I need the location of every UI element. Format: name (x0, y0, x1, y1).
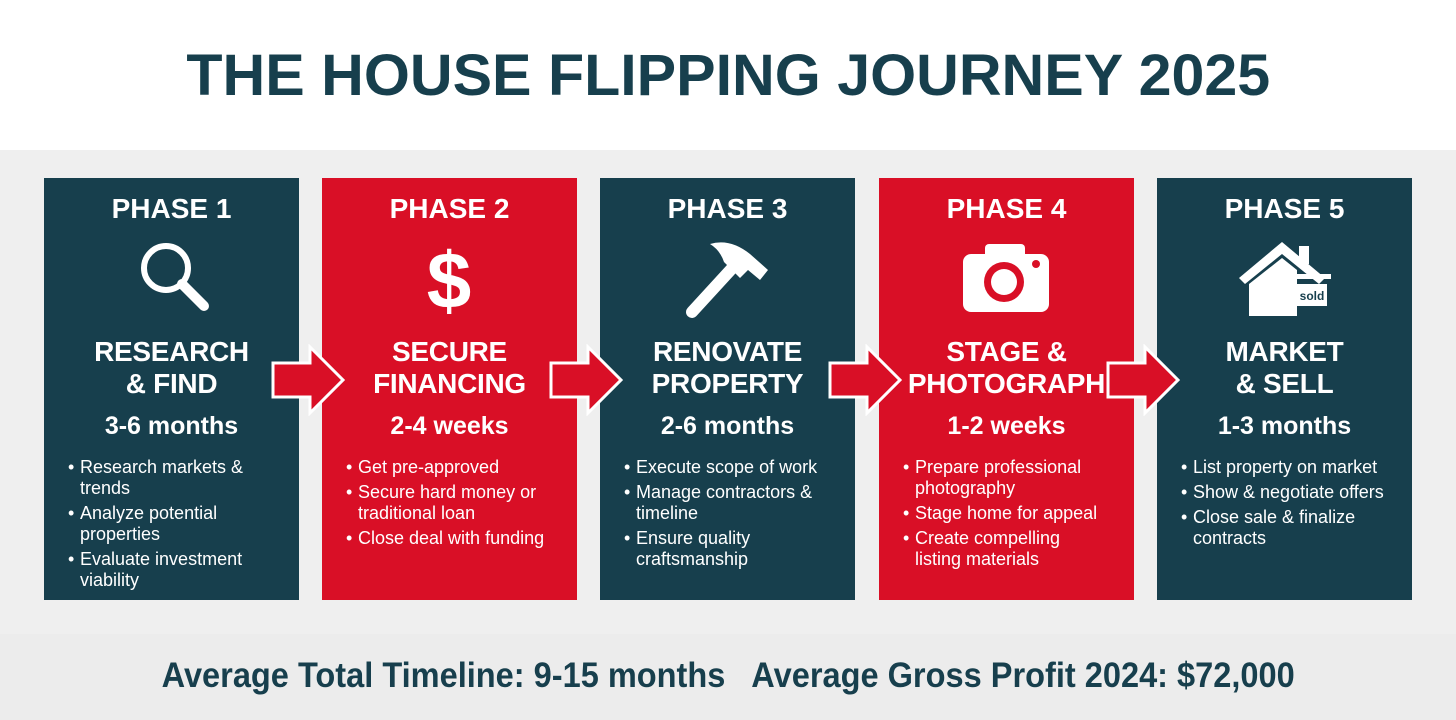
arrow 2 (550, 344, 623, 416)
bullets: List property on market (1193, 457, 1377, 477)
bullets (904, 457, 1097, 569)
footer stats: Average Total Timeline: 9-15 months Average Gross Profit 2024: $72,000 (161, 656, 1295, 695)
duration: 1-2 weeks (947, 412, 1066, 440)
icon: camera (963, 244, 1049, 312)
phase label: PHASE 2 (390, 193, 509, 224)
bullets: Analyze potential properties (80, 503, 217, 544)
bullets: Research markets & trends (80, 457, 243, 498)
bullets: Execute scope of work (636, 457, 817, 477)
panel: phase 5 (1157, 178, 1412, 600)
bullets: Show & negotiate offers (1193, 482, 1384, 502)
arrow 1 (272, 344, 345, 416)
heading (1226, 336, 1344, 399)
heading: FINANCING (373, 368, 526, 399)
phase label: PHASE 3 (668, 193, 787, 224)
duration: 3-6 months (105, 412, 238, 440)
heading: & SELL (1236, 368, 1333, 399)
panel: phase 3 (600, 178, 855, 600)
title: THE HOUSE FLIPPING JOURNEY 2025 (186, 43, 1270, 108)
heading: RESEARCH (94, 336, 249, 367)
icon: house sold: sold (1300, 289, 1324, 303)
icon: magnifier (141, 243, 209, 311)
bullets: Create compelling listing materials (915, 528, 1060, 569)
phase label: PHASE 5 (1225, 193, 1344, 224)
bullets: Ensure quality craftsmanship (636, 528, 750, 569)
duration: 1-3 months (1218, 412, 1351, 440)
phase label: PHASE 1 (112, 193, 231, 224)
bullets (624, 457, 818, 569)
bullets: Close deal with funding (358, 528, 544, 548)
heading: MARKET (1226, 336, 1343, 367)
heading: PHOTOGRAPH (908, 368, 1105, 399)
heading: RENOVATE (653, 336, 802, 367)
bullets: Stage home for appeal (915, 503, 1097, 523)
bullets: Secure hard money or traditional loan (358, 482, 536, 523)
heading: & FIND (126, 368, 217, 399)
icon: hammer (686, 242, 768, 318)
phase label: PHASE 4 (947, 193, 1066, 224)
icon: house sold (1239, 242, 1331, 316)
heading (908, 336, 1105, 399)
arrow 3 (828, 344, 902, 416)
bullets (1182, 457, 1384, 548)
duration: 2-4 weeks (390, 412, 509, 440)
panel: phase 1 (44, 178, 299, 600)
bullets: Get pre-approved (358, 457, 499, 477)
arrow 4 (1106, 344, 1180, 416)
heading: PROPERTY (652, 368, 803, 399)
heading: STAGE & (946, 336, 1067, 367)
duration: 2-6 months (661, 412, 794, 440)
heading (652, 336, 804, 399)
bullets (68, 457, 243, 590)
bullets: Prepare professional photography (915, 457, 1081, 498)
bullets: Evaluate investment viability (80, 549, 242, 590)
panel: phase 4 (879, 178, 1134, 600)
bullets: Close sale & finalize contracts (1193, 507, 1355, 548)
panel: phase 2 (322, 178, 577, 600)
bullets: Manage contractors & timeline (636, 482, 812, 523)
heading (94, 336, 249, 399)
heading: SECURE (392, 336, 507, 367)
heading (373, 336, 526, 399)
bullets (346, 457, 544, 548)
